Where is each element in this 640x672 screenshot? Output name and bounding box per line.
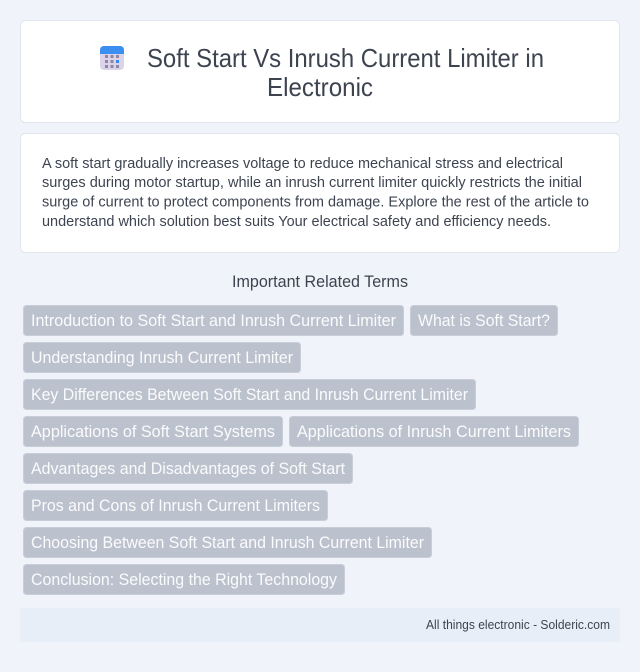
tag: applications limiters: Applications of Inrush Current Limiters [297,422,571,441]
tag: understanding [24,342,300,372]
tag: what is soft start [410,306,558,336]
tag: pros and cons [24,490,328,520]
text block: summary paragraph: understand which solution best suits Your electrical safety and efficiency needs. [42,213,551,230]
tag: advantages: Advantages and Disadvantages of Soft Start [31,459,345,478]
footer: All things electronic - Solderic.com [426,618,610,632]
tag: introduction [24,306,404,336]
tag: conclusion [24,564,344,594]
panel: summary [20,134,620,252]
tag: choosing: Choosing Between Soft Start and Inrush Current Limiter [31,533,424,552]
title [147,43,544,102]
tag: key differences: Key Differences Between Soft Start and Inrush Current Limiter [31,385,468,404]
tag: applications limiters [290,416,578,446]
tag: conclusion: Conclusion: Selecting the Right Technology [31,570,337,589]
title: Soft Start Vs Inrush Current Limiter in [147,43,544,73]
tag: applications soft start: Applications of Soft Start Systems [31,422,275,441]
panel: title card [20,20,620,122]
tag: applications soft start [24,416,282,446]
tag: pros and cons: Pros and Cons of Inrush Current Limiters [31,496,320,515]
title: Electronic [267,72,373,102]
text block: summary paragraph [42,155,589,230]
tag: key differences [24,380,476,410]
tag: what is soft start: What is Soft Start? [418,311,550,330]
text block: summary paragraph: surges during motor startup, while an inrush current limiter quickly restricts the initial [42,174,582,191]
text block: summary paragraph: A soft start gradually increases voltage to reduce mechanical stress and electrical [42,155,563,172]
heading: related terms: Important Related Terms [232,273,408,291]
tag list [24,306,578,594]
footer [20,608,620,642]
tag: understanding: Understanding Inrush Current Limiter [31,348,293,367]
tag: choosing [24,528,432,558]
icon: calendar [100,46,124,70]
tag: advantages [24,454,352,484]
text block: summary paragraph: surge of current to protect components from damage. Explore the rest of the article to [42,194,589,210]
tag: introduction: Introduction to Soft Start and Inrush Current Limiter [31,311,396,330]
